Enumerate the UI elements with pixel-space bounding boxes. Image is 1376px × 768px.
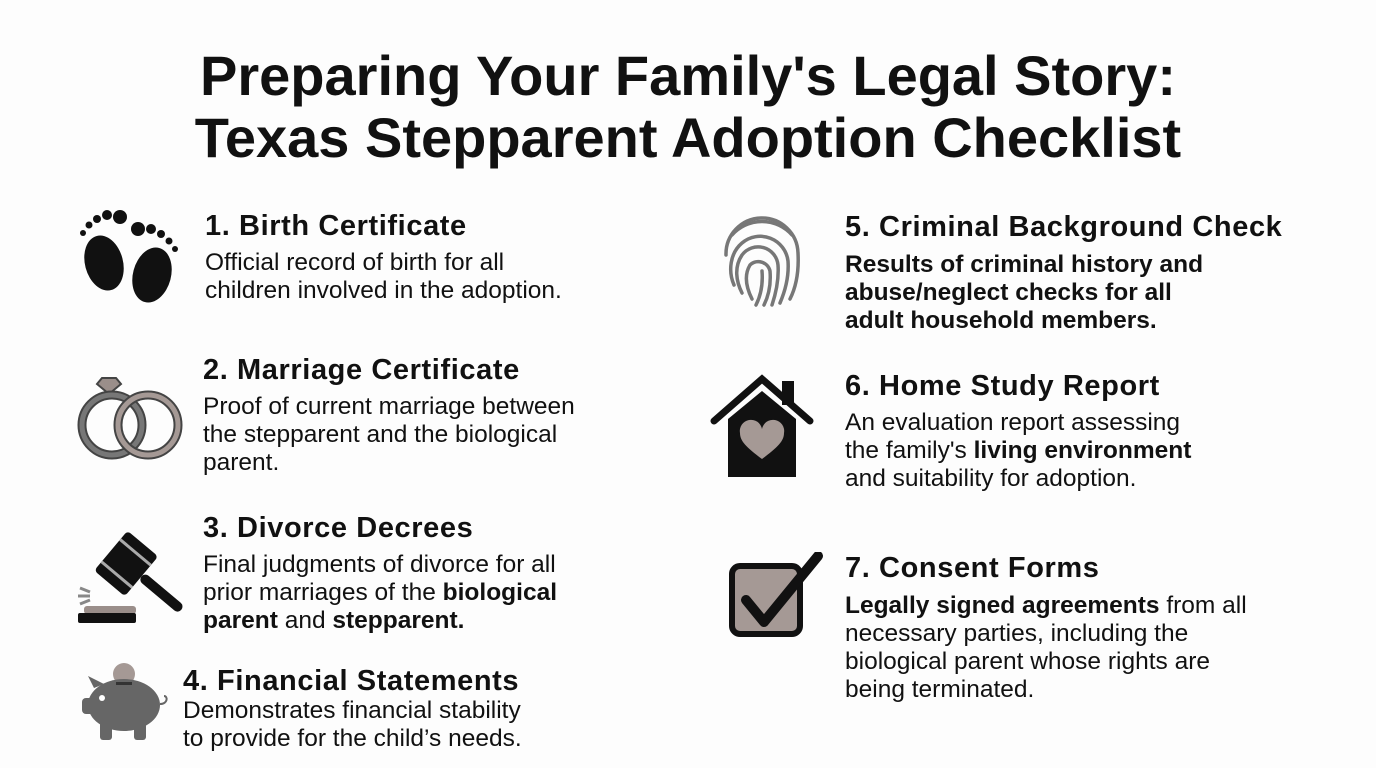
- text: Official record of birth for all: [205, 249, 504, 276]
- item 7: [845, 552, 1247, 703]
- text: and suitability for adoption.: [845, 465, 1136, 492]
- icon: checkbox: [729, 552, 823, 637]
- text: Legally signed agreements from all: [845, 592, 1247, 619]
- text: the family's living environment: [845, 437, 1191, 464]
- text: 4. Financial Statements: [183, 665, 519, 697]
- item 1: [205, 210, 562, 304]
- item 6: [845, 370, 1192, 492]
- icon: piggy bank: [82, 663, 168, 740]
- text: Demonstrates financial stability: [183, 697, 521, 724]
- item 2: [203, 354, 575, 476]
- text: 7. Consent Forms: [845, 552, 1100, 584]
- text: children involved in the adoption.: [205, 277, 562, 304]
- text: being terminated.: [845, 676, 1034, 703]
- item 5: [845, 211, 1282, 334]
- item 3: [203, 512, 557, 634]
- text: 2. Marriage Certificate: [203, 354, 520, 386]
- text: Results of criminal history and: [845, 251, 1203, 278]
- text: Final judgments of divorce for all: [203, 551, 556, 578]
- text: 6. Home Study Report: [845, 370, 1160, 402]
- text: 3. Divorce Decrees: [203, 512, 473, 544]
- icon: baby feet: [80, 210, 178, 302]
- item 4: [183, 665, 522, 752]
- text: biological parent whose rights are: [845, 648, 1210, 675]
- title: Preparing Your Family's Legal Story:: [200, 44, 1176, 107]
- text: abuse/neglect checks for all: [845, 279, 1172, 306]
- text: An evaluation report assessing: [845, 409, 1180, 436]
- icon: rings: [78, 377, 182, 460]
- text: parent and stepparent.: [203, 607, 464, 634]
- icon: fingerprint: [724, 216, 800, 307]
- text: to provide for the child’s needs.: [183, 725, 522, 752]
- text: 5. Criminal Background Check: [845, 211, 1282, 243]
- icon: house with heart: [710, 374, 814, 477]
- text: necessary parties, including the: [845, 620, 1188, 647]
- text: adult household members.: [845, 307, 1157, 334]
- text: prior marriages of the biological: [203, 579, 557, 606]
- title: Texas Stepparent Adoption Checklist: [195, 106, 1181, 169]
- text: parent.: [203, 449, 279, 476]
- title: [195, 44, 1181, 169]
- text: the stepparent and the biological: [203, 421, 557, 448]
- text: 1. Birth Certificate: [205, 210, 467, 242]
- icon: gavel: [78, 532, 182, 623]
- text: Proof of current marriage between: [203, 393, 575, 420]
